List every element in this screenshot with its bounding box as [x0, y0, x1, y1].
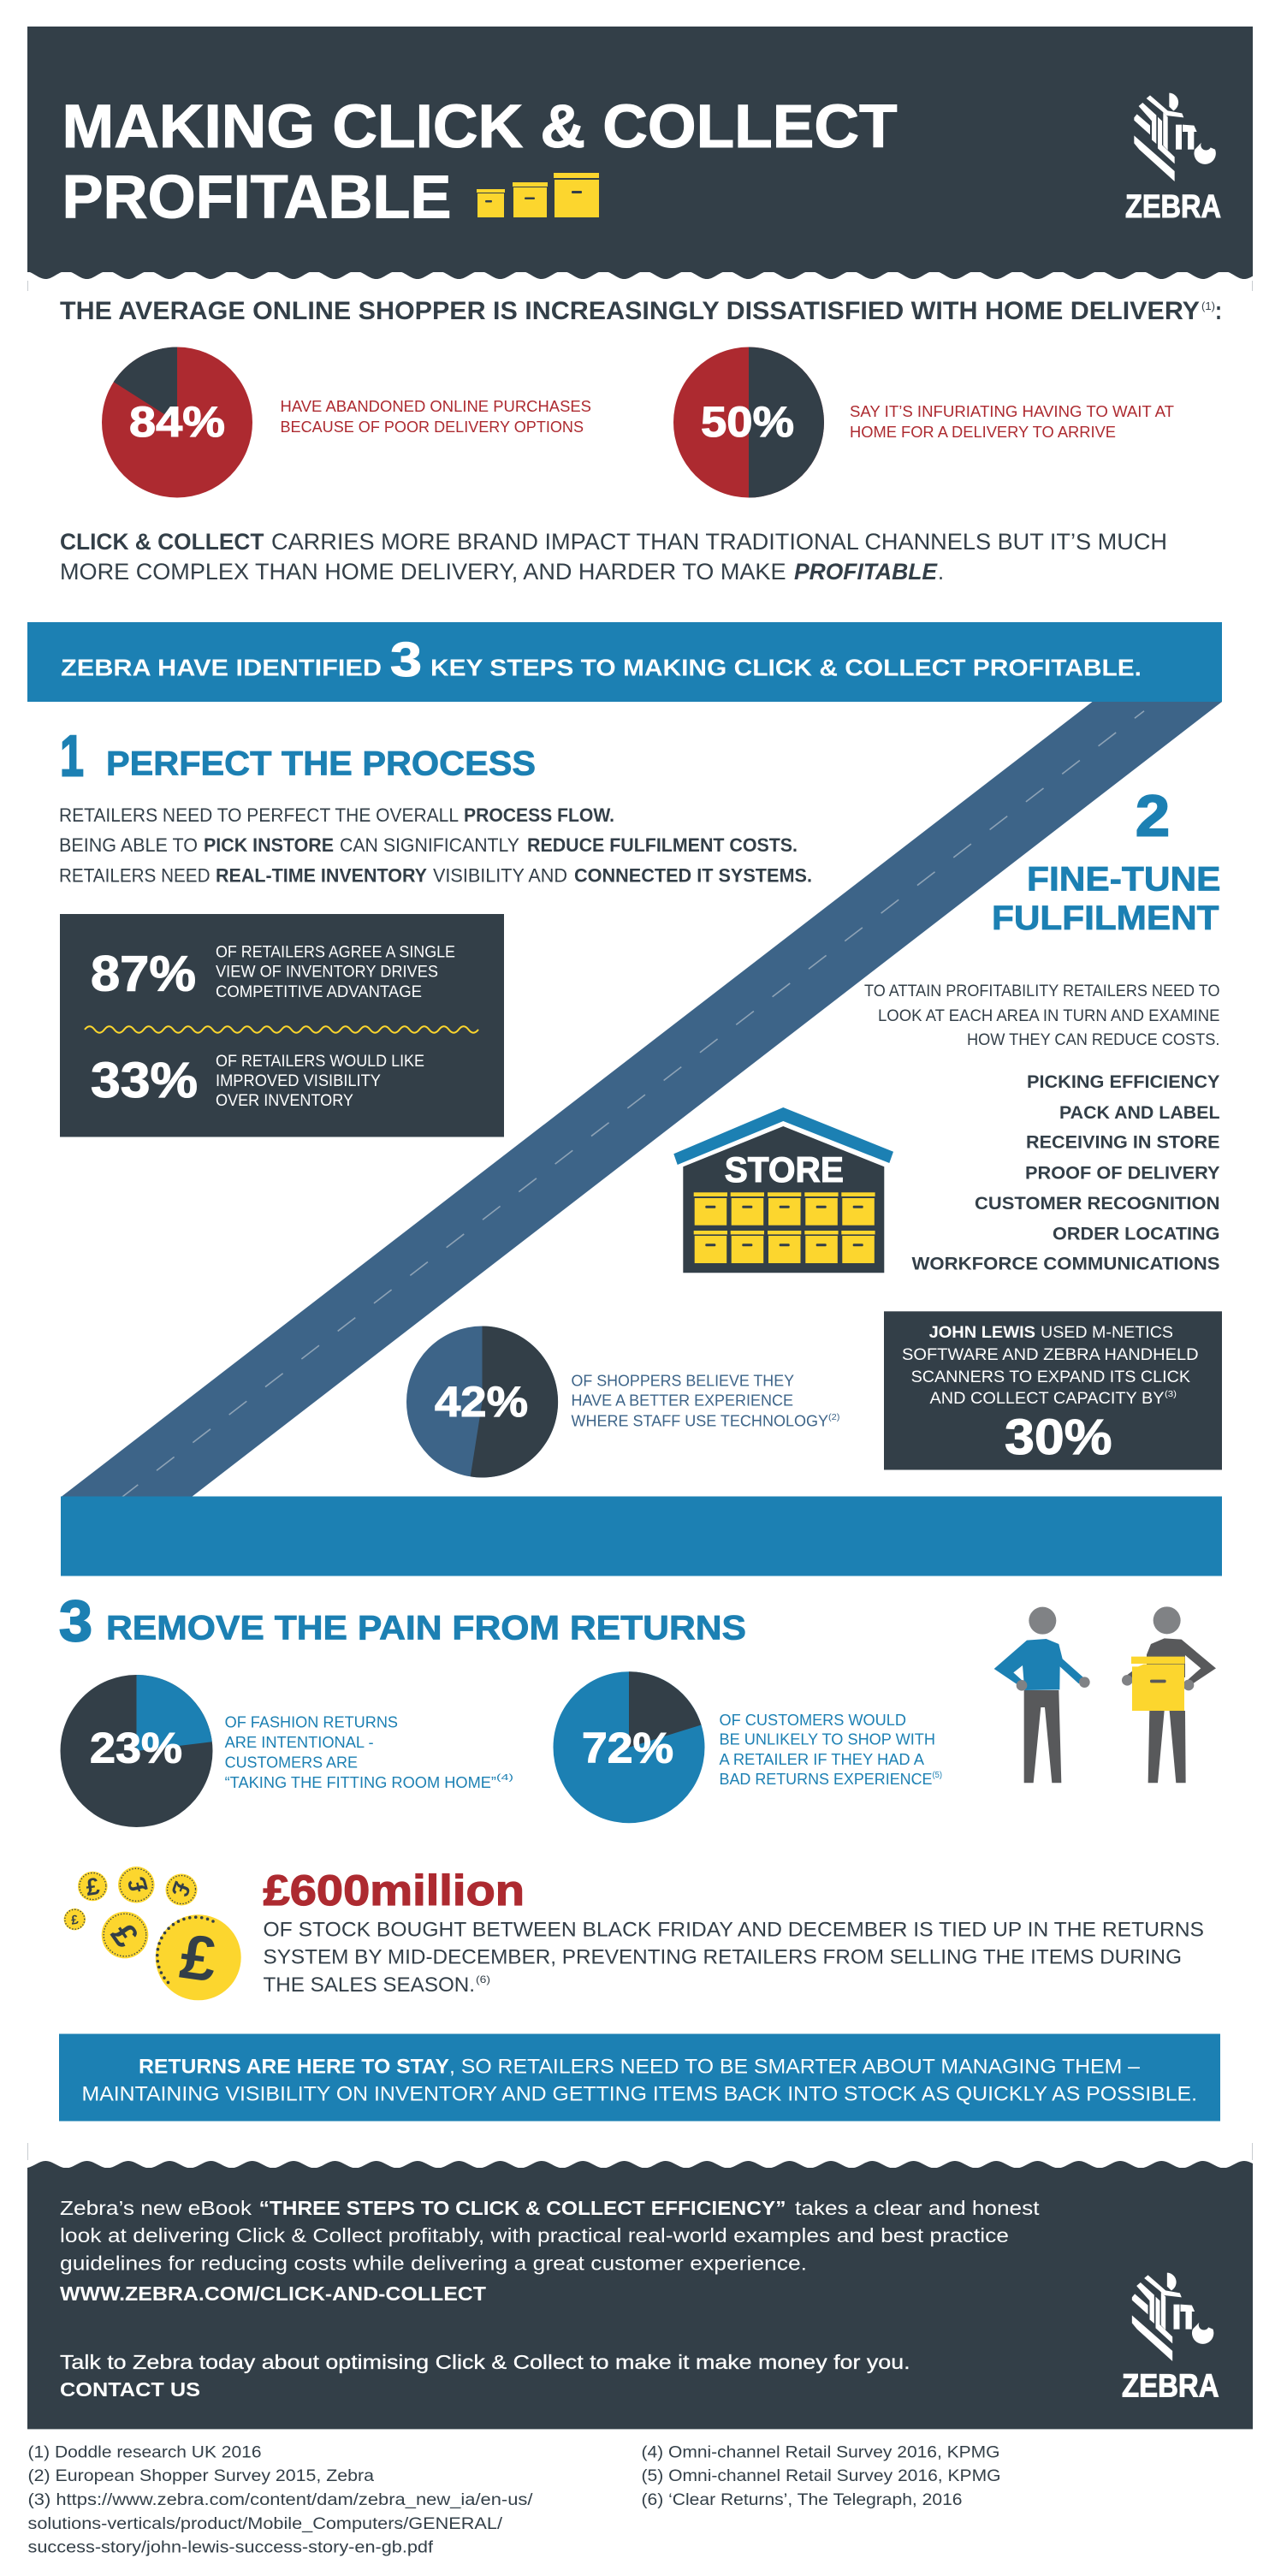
text: brand impact paragraph: MORE COMPLEX THAN HOME DELIVERY, AND HARDER TO MAKE [60, 559, 786, 585]
band: blue divider [61, 1496, 1222, 1576]
text: attain profitability [864, 982, 1220, 1049]
text: brand impact paragraph: CARRIES MORE BRAND IMPACT THAN TRADITIONAL CHANNELS BUT IT’S MUCH [271, 529, 1167, 555]
text: contact call to action [60, 2351, 910, 2401]
text: shoppers believe: (2) [828, 1413, 840, 1422]
title [62, 93, 897, 231]
text: references left column: (1) Doddle research UK 2016 [27, 2444, 262, 2461]
icon: staff figure holding box [1122, 1606, 1216, 1783]
heading: step 1 perfect the process: 1 [60, 723, 84, 788]
text: brand impact paragraph: PROFITABLE [794, 559, 938, 585]
text: contact call to action: Talk to Zebra today about optimising Click & Collect to make it make money for you. [60, 2351, 910, 2373]
icon: pound coins [64, 1867, 241, 2000]
text: ebook description: “THREE STEPS TO CLICK & COLLECT EFFICIENCY” [259, 2197, 786, 2219]
pie chart: 42%: 42% [435, 1378, 528, 1426]
pie chart: 50% [673, 347, 824, 498]
text: fashion returns: CUSTOMERS ARE [225, 1754, 358, 1772]
panel: john lewis case study: USED M-NETICS [1041, 1323, 1173, 1342]
panel: john lewis case study: 30% [1005, 1410, 1112, 1465]
text: fashion returns [225, 1714, 513, 1791]
text: fashion returns: ARE INTENTIONAL - [225, 1734, 374, 1751]
icon: zebra logo footer: ZEBRA [1122, 2369, 1219, 2405]
heading: step 3 remove the pain: REMOVE THE PAIN FROM RETURNS [106, 1609, 746, 1647]
text: abandoned purchases: BECAUSE OF POOR DELIVERY OPTIONS [281, 418, 584, 436]
text: 600 million statistic: £600million [264, 1867, 525, 1914]
text: brand impact paragraph: . [938, 559, 944, 585]
stat: 33%: 33% [91, 1053, 198, 1108]
icon: customer figure [994, 1607, 1090, 1783]
text: ebook description: WWW.ZEBRA.COM/CLICK-AND-COLLECT [60, 2282, 486, 2305]
heading: step 2 fine-tune fulfilment: FULFILMENT [992, 899, 1219, 937]
text: unlikely to shop: OF CUSTOMERS WOULD [719, 1712, 906, 1729]
text: 600 million statistic: THE SALES SEASON. [264, 1974, 475, 1997]
text: attain profitability: LOOK AT EACH AREA IN TURN AND EXAMINE [878, 1007, 1220, 1025]
stat: 87%: COMPETITIVE ADVANTAGE [216, 983, 422, 1001]
callout: returns are here to stay: MAINTAINING VISIBILITY ON INVENTORY AND GETTING ITEMS BACK INTO STOCK AS QUICKLY AS POSSIBLE. [82, 2083, 1197, 2105]
banner: three key steps: 3 [390, 632, 422, 687]
icon: pound coins: £ [70, 1913, 80, 1928]
stat: 33% [91, 1053, 424, 1110]
text: references right column [642, 2444, 1001, 2509]
panel: john lewis case study [884, 1311, 1222, 1470]
pie chart: 72% [553, 1671, 705, 1823]
pie chart: 84% [102, 347, 252, 498]
text: references left column: (3) https://www.zebra.com/content/dam/zebra_new_ia/en-us/ [27, 2491, 533, 2509]
icon: store building: STORE [725, 1149, 844, 1190]
text: 600 million statistic: SYSTEM BY MID-DECEMBER, PREVENTING RETAILERS FROM SELLING THE ITEMS DURING [264, 1945, 1182, 1968]
list: fulfilment areas: WORKFORCE COMMUNICATIONS [912, 1255, 1220, 1274]
text: attain profitability: TO ATTAIN PROFITABILITY RETAILERS NEED TO [864, 982, 1220, 1000]
text: contact call to action: CONTACT US [60, 2378, 200, 2401]
text: process flow paragraph: BEING ABLE TO [59, 834, 198, 856]
panel: john lewis case study: AND COLLECT CAPACITY BY [929, 1389, 1164, 1408]
stat: 87%: 87% [91, 947, 196, 1002]
text: process flow paragraph: CONNECTED IT SYSTEMS. [574, 865, 812, 887]
text: ebook description [60, 2197, 1040, 2305]
icon: pound coins: £ [122, 1874, 154, 1896]
icon: zebra logo header: ZEBRA [1125, 189, 1221, 225]
title: PROFITABLE [62, 164, 452, 231]
icon: pound coins: £ [166, 1879, 196, 1901]
text: references right column: (6) ‘Clear Returns’, The Telegraph, 2016 [642, 2491, 962, 2509]
text: references right column: (4) Omni-channel Retail Survey 2016, KPMG [642, 2444, 999, 2461]
text: references right column: (5) Omni-channel Retail Survey 2016, KPMG [642, 2467, 1001, 2485]
text: references left column: (2) European Shopper Survey 2015, Zebra [27, 2467, 374, 2485]
text: process flow paragraph: REAL-TIME INVENTORY [216, 865, 427, 887]
pie chart: 23%: 23% [90, 1724, 182, 1772]
panel: john lewis case study: (3) [1165, 1390, 1177, 1399]
icon: zebra logo header [1125, 93, 1221, 225]
list: fulfilment areas [912, 1072, 1220, 1274]
text: attain profitability: HOW THEY CAN REDUCE COSTS. [967, 1031, 1220, 1049]
stat: 33%: OVER INVENTORY [216, 1092, 353, 1110]
banner: three key steps: KEY STEPS TO MAKING CLICK & COLLECT PROFITABLE. [430, 654, 1142, 680]
heading: step 3 remove the pain: 3 [59, 1588, 92, 1653]
heading: step 2 fine-tune fulfilment: 2 [1136, 784, 1170, 849]
icon: pound coins: £ [104, 1917, 145, 1954]
heading: step 2 fine-tune fulfilment [992, 784, 1220, 937]
list: fulfilment areas: PROOF OF DELIVERY [1025, 1164, 1220, 1184]
pie chart: 42% [406, 1326, 558, 1477]
footer panel [25, 2143, 1265, 2429]
stat: 33%: IMPROVED VISIBILITY [216, 1072, 381, 1090]
heading: step 2 fine-tune fulfilment: FINE-TUNE [1027, 861, 1220, 899]
heading: step 1 perfect the process: PERFECT THE PROCESS [106, 745, 536, 783]
panel: retailer stats [60, 914, 504, 1137]
list: fulfilment areas: PACK AND LABEL [1059, 1103, 1220, 1123]
stat: 87%: OF RETAILERS AGREE A SINGLE [216, 944, 455, 962]
text: fashion returns: “TAKING THE FITTING ROOM HOME” [225, 1774, 496, 1791]
panel: john lewis case study: SCANNERS TO EXPAND ITS CLICK [911, 1368, 1190, 1386]
text: 600 million statistic [264, 1867, 1204, 1997]
text: process flow paragraph [59, 804, 812, 887]
text: references left column [27, 2444, 533, 2557]
stat: 87%: VIEW OF INVENTORY DRIVES [216, 964, 438, 982]
text: process flow paragraph: CAN SIGNIFICANTLY [340, 834, 519, 856]
text: references left column: solutions-verticals/product/Mobile_Computers/GENERAL/ [27, 2515, 503, 2533]
panel: john lewis case study: JOHN LEWIS [929, 1323, 1035, 1342]
text: infuriating wait: HOME FOR A DELIVERY TO ARRIVE [850, 424, 1116, 441]
icon: store building [673, 1107, 893, 1273]
icon: zebra logo footer [1122, 2273, 1219, 2405]
heading: step 1 perfect the process [60, 723, 536, 788]
text: brand impact paragraph [60, 529, 1167, 585]
text: shoppers believe: HAVE A BETTER EXPERIENCE [572, 1392, 793, 1409]
text: brand impact paragraph: CLICK & COLLECT [60, 529, 264, 555]
header panel [25, 27, 1265, 291]
text: ebook description: takes a clear and honest [795, 2197, 1040, 2219]
text: fashion returns: OF FASHION RETURNS [225, 1714, 398, 1731]
pie chart: 50%: 50% [701, 398, 794, 446]
pie chart: 84%: 84% [129, 398, 225, 446]
text: shoppers believe: WHERE STAFF USE TECHNOLOGY [572, 1413, 828, 1430]
heading: online shopper dissatisfied: : [1215, 297, 1222, 325]
text: 600 million statistic: OF STOCK BOUGHT BETWEEN BLACK FRIDAY AND DECEMBER IS TIED UP IN THE RETURNS [264, 1919, 1204, 1941]
pie chart: 72%: 72% [582, 1724, 673, 1772]
list: fulfilment areas: CUSTOMER RECOGNITION [975, 1194, 1220, 1214]
panel: john lewis case study: SOFTWARE AND ZEBRA HANDHELD [902, 1345, 1199, 1364]
pie chart: 23% [60, 1675, 212, 1827]
text: unlikely to shop: BAD RETURNS EXPERIENCE [719, 1771, 933, 1788]
icon: three yellow boxes [477, 173, 599, 217]
text: abandoned purchases: HAVE ABANDONED ONLINE PURCHASES [281, 398, 591, 415]
text: ebook description: guidelines for reducing costs while delivering a great customer experience. [60, 2252, 807, 2274]
text: 600 million statistic: (6) [476, 1974, 490, 1985]
text: infuriating wait: SAY IT’S INFURIATING HAVING TO WAIT AT [850, 403, 1174, 420]
text: references left column: success-story/john-lewis-success-story-en-gb.pdf [27, 2539, 434, 2557]
text: infuriating wait [850, 403, 1174, 441]
callout: returns are here to stay: RETURNS ARE HERE TO STAY [139, 2056, 449, 2078]
stat: 33%: OF RETAILERS WOULD LIKE [216, 1053, 424, 1071]
icon: pound coins: £ [84, 1873, 102, 1901]
banner: three key steps [27, 622, 1222, 702]
text: unlikely to shop [719, 1712, 942, 1788]
text: process flow paragraph: PICK INSTORE [204, 834, 334, 856]
text: ebook description: Zebra’s new eBook [60, 2197, 252, 2219]
text: process flow paragraph: RETAILERS NEED [59, 865, 211, 887]
text: process flow paragraph: VISIBILITY AND [433, 865, 567, 887]
store boxes [694, 1192, 875, 1263]
heading: step 3 remove the pain [59, 1588, 746, 1653]
banner: three key steps: ZEBRA HAVE IDENTIFIED [61, 654, 382, 680]
list: fulfilment areas: ORDER LOCATING [1053, 1224, 1220, 1244]
text: shoppers believe: OF SHOPPERS BELIEVE THEY [572, 1373, 794, 1390]
list: fulfilment areas: PICKING EFFICIENCY [1027, 1072, 1220, 1092]
callout: returns are here to stay [59, 2033, 1220, 2121]
text: process flow paragraph: PROCESS FLOW. [464, 804, 614, 826]
title: MAKING CLICK & COLLECT [62, 93, 897, 161]
road [62, 702, 1222, 1497]
text: process flow paragraph: REDUCE FULFILMENT COSTS. [527, 834, 798, 856]
heading: online shopper dissatisfied: (1) [1201, 300, 1215, 312]
text: ebook description: look at delivering Click & Collect profitably, with practical real-world examples and best practice [60, 2224, 1009, 2247]
text: fashion returns: (4) [496, 1773, 513, 1783]
text: process flow paragraph: RETAILERS NEED TO PERFECT THE OVERALL [59, 804, 459, 826]
heading: online shopper dissatisfied: THE AVERAGE ONLINE SHOPPER IS INCREASINGLY DISSATISFIED WITH HOME DELIVERY [60, 297, 1200, 325]
text: unlikely to shop: A RETAILER IF THEY HAD A [719, 1751, 924, 1768]
text: unlikely to shop: (5) [933, 1771, 942, 1780]
text: unlikely to shop: BE UNLIKELY TO SHOP WITH [719, 1731, 935, 1748]
text: shoppers believe [572, 1373, 840, 1430]
stat: 87% [91, 944, 455, 1002]
icon: pound coins: £ [176, 1920, 221, 1996]
callout: returns are here to stay: , SO RETAILERS NEED TO BE SMARTER ABOUT MANAGING THEM – [449, 2056, 1141, 2078]
list: fulfilment areas: RECEIVING IN STORE [1026, 1132, 1220, 1152]
text: abandoned purchases [281, 398, 591, 436]
